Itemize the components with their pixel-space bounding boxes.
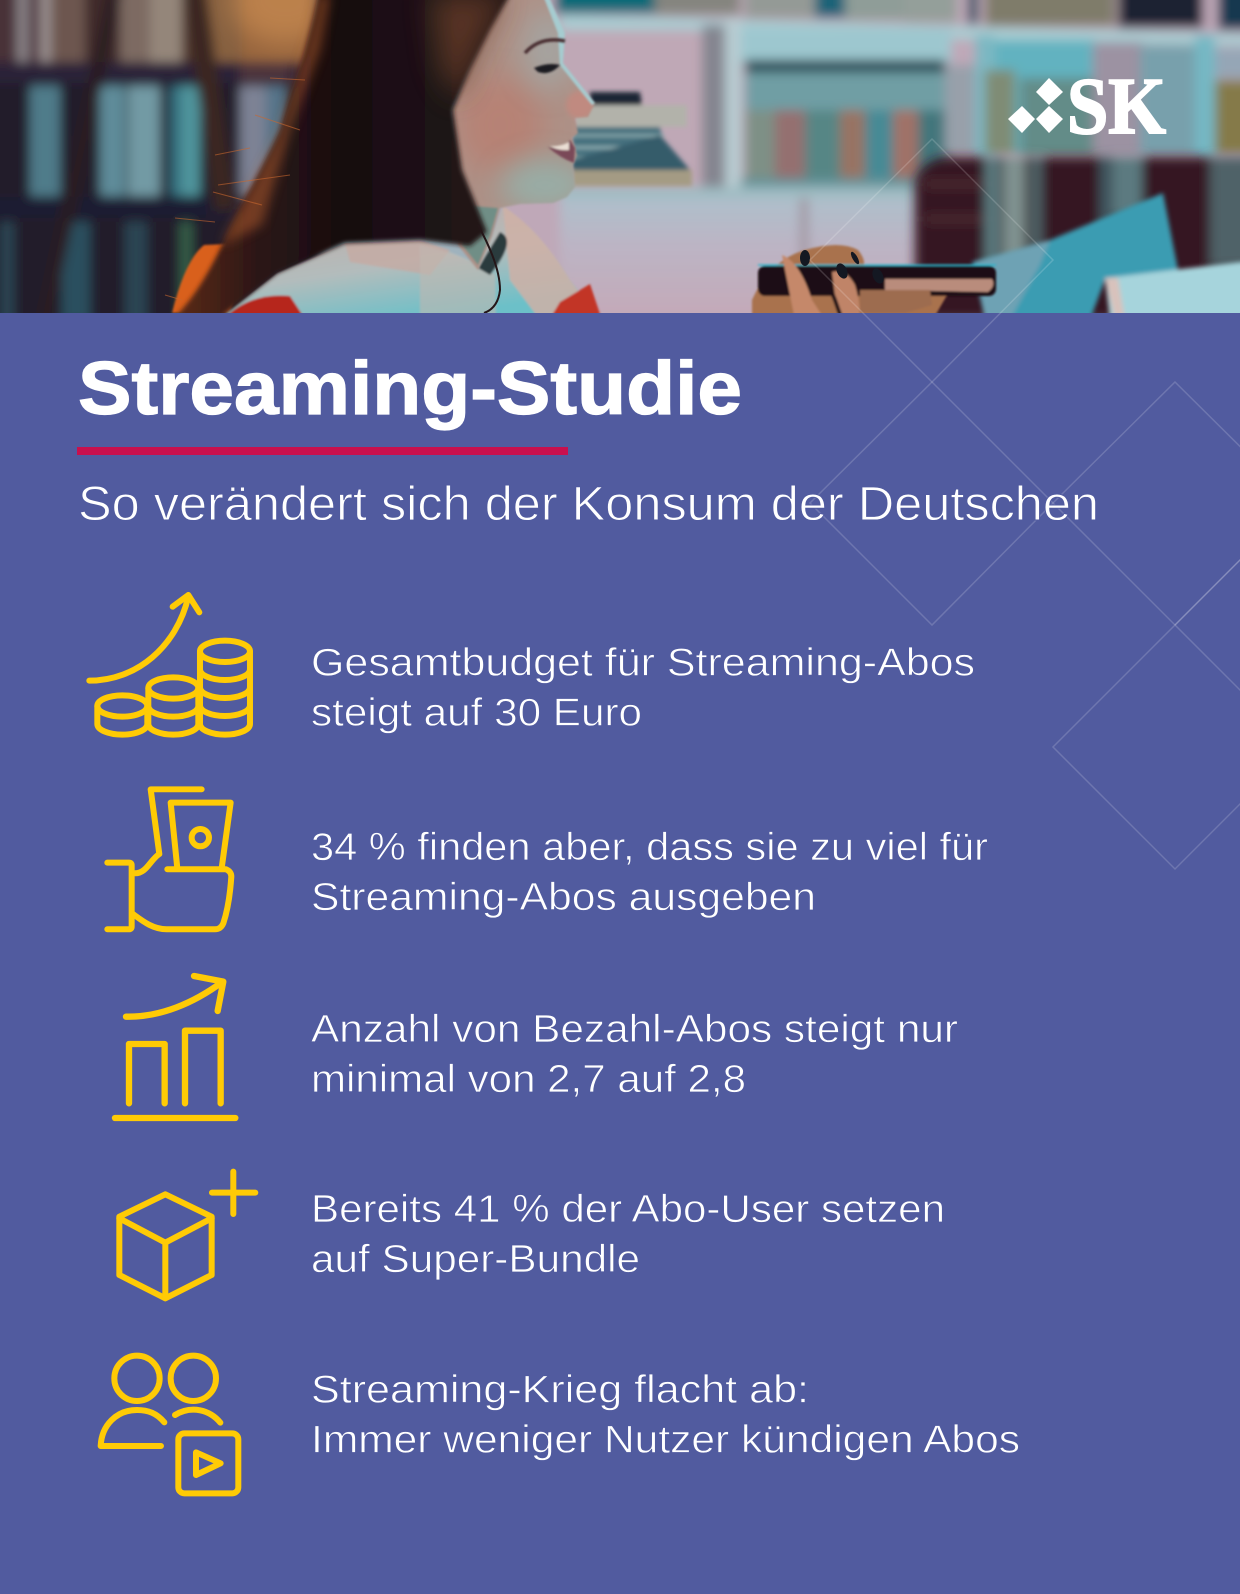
photo: painted nails xyxy=(800,250,886,285)
photo: left bookshelf xyxy=(0,0,320,340)
text: paid subscriptions: minimal von 2,7 auf 2,8 xyxy=(311,1058,746,1101)
text: super bundle xyxy=(311,1188,945,1281)
red divider under title xyxy=(77,447,568,455)
text: paid subscriptions: Anzahl von Bezahl-Abos steigt nur xyxy=(311,1008,958,1051)
text: overspending: Streaming-Abos ausgeben xyxy=(311,876,816,919)
photo: sweater xyxy=(217,206,602,320)
photo: eyebrow, eye and mouth xyxy=(525,40,575,163)
photo: hand holding remote xyxy=(752,245,996,320)
text: streaming war xyxy=(311,1368,1020,1462)
text: budget: Gesamtbudget für Streaming-Abos xyxy=(311,642,975,684)
text: budget xyxy=(311,642,975,734)
text: streaming war: Streaming-Krieg flacht ab: xyxy=(311,1368,809,1412)
text: streaming war: Immer weniger Nutzer kündigen Abos xyxy=(311,1418,1020,1462)
text: paid subscriptions xyxy=(311,1008,958,1101)
subtitle: So verändert sich der Konsum der Deutschen xyxy=(78,478,1099,531)
logo mark: three diamonds xyxy=(1008,78,1063,133)
photo: woman with remote control in front of bookshelves xyxy=(0,0,1240,340)
icon: bar chart with arrow xyxy=(115,976,235,1118)
logo wordmark: SK xyxy=(1067,63,1166,151)
photo: warm light glow xyxy=(230,0,340,45)
logo: SK xyxy=(1008,63,1166,151)
photo: face and neck xyxy=(452,0,595,270)
photo: long dark hair xyxy=(165,0,510,320)
photo: teal cushions xyxy=(972,193,1240,320)
title: Streaming-Studie xyxy=(78,346,742,430)
photo: orange chair xyxy=(170,242,233,313)
text: super bundle: Bereits 41 % der Abo-User setzen xyxy=(311,1188,945,1231)
photo: shelves and wall behind the woman xyxy=(500,0,1240,340)
icon: hand holding money xyxy=(107,789,231,929)
icon: box with plus xyxy=(119,1172,255,1298)
icon: coins with rising arrow xyxy=(89,595,250,735)
background diamond pattern xyxy=(810,139,1240,869)
text: overspending xyxy=(311,826,988,919)
icon: two users with play button xyxy=(101,1356,238,1493)
text: budget: steigt auf 30 Euro xyxy=(311,692,642,734)
text: overspending: 34 % finden aber, dass sie zu viel für xyxy=(311,826,988,869)
text: super bundle: auf Super-Bundle xyxy=(311,1238,640,1281)
photo: stack of books on the shelf xyxy=(572,92,692,186)
photo: plaid sofa xyxy=(915,157,1240,320)
